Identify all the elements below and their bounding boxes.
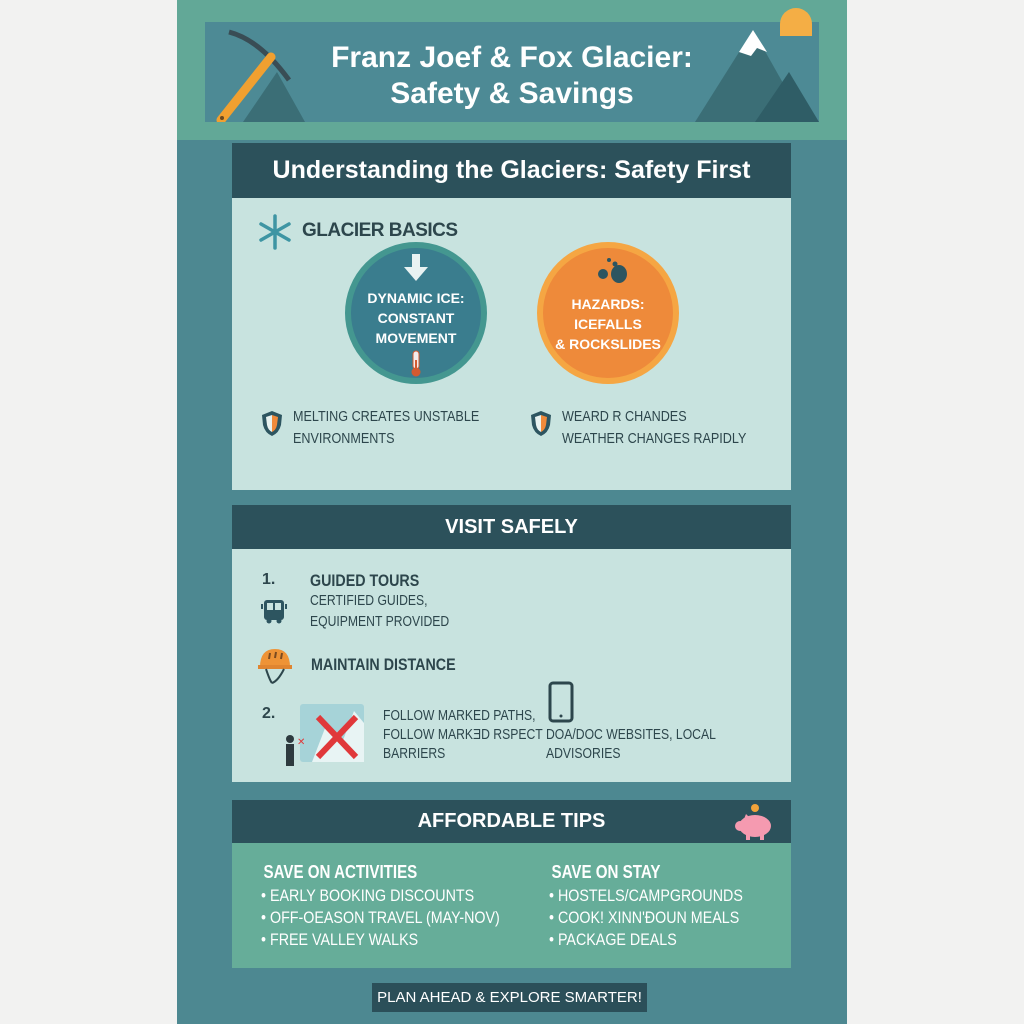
bullet: melting (262, 408, 479, 447)
section 3 header (232, 800, 791, 843)
circle: dynamic ice (345, 242, 487, 384)
section 2 header: VISIT SAFELY (445, 516, 578, 538)
column: save on stay: • PACKAGE DEALS (549, 930, 677, 949)
bullet: weather (531, 408, 746, 447)
column: save on activities: • FREE VALLEY WALKS (261, 930, 418, 949)
item: doc websites: DOA/DOC WEBSITES, LOCAL (546, 727, 716, 743)
circle: dynamic ice: DYNAMIC ICE: (367, 290, 465, 306)
bullet: weather: WEARD R CHANDES (562, 408, 687, 425)
item 2: follow paths: 2. (262, 705, 275, 722)
item 2: follow paths: FOLLOW MARKƎD RSPECT (383, 727, 543, 743)
item: maintain distance (258, 649, 456, 684)
item 2: follow paths (262, 704, 543, 766)
panel: glacier basics (232, 198, 791, 490)
section 3 header: AFFORDABLE TIPS (418, 810, 605, 832)
item 2: follow paths: FOLLOW MARKED PATHS, (383, 708, 535, 724)
bullet: melting: ENVIRONMENTS (293, 430, 395, 447)
icon: barrier crossed: ✕ (297, 737, 305, 748)
title text: Franz Joef & Fox Glacier: (331, 41, 693, 74)
icon: sun (780, 8, 812, 36)
icon: mountain with snow (695, 30, 819, 122)
circle: hazards: HAZARDS: (571, 296, 645, 312)
section 2 header (232, 505, 791, 549)
bullet: weather: WEATHER CHANGES RAPIDLY (562, 430, 746, 447)
bullet: melting: MELTING CREATES UNSTABLE (293, 408, 479, 425)
icon: ice axe and left mountain (216, 30, 305, 122)
section 1 header: Understanding the Glaciers: Safety First (273, 156, 750, 184)
column: save on stay: SAVE ON STAY (552, 862, 660, 882)
circle: dynamic ice: CONSTANT (378, 310, 454, 326)
panel: affordable tips (232, 843, 791, 968)
icon: thermometer (412, 350, 420, 376)
item 1: guided tours: CERTIFIED GUIDES, (310, 593, 428, 609)
section 1 header (232, 143, 791, 198)
icon: rocks (598, 258, 627, 283)
column: save on activities: • OFF-OEASON TRAVEL (MAY-NOV) (261, 908, 500, 927)
footer button: PLAN AHEAD & EXPLORE SMARTER! (377, 989, 642, 1006)
icon: bus (261, 600, 287, 624)
column: save on activities (261, 862, 500, 949)
column: save on activities: SAVE ON ACTIVITIES (264, 862, 417, 882)
column: save on stay: • COOK! XINN'ĐOUN MEALS (549, 908, 739, 927)
title text: Safety & Savings (390, 77, 634, 110)
icon: helmet (258, 649, 292, 684)
column: save on stay (549, 862, 743, 949)
icon: snowflake (259, 214, 291, 250)
icon: barrier crossed (286, 704, 364, 766)
circle: dynamic ice: MOVEMENT (376, 330, 456, 346)
title box (205, 22, 819, 122)
item: doc websites: ADVISORIES (546, 746, 620, 762)
title text (331, 41, 693, 110)
item 1: guided tours: 1. (262, 571, 275, 588)
icon: arrow down (404, 254, 428, 281)
item 1: guided tours (261, 571, 449, 630)
item: maintain distance: MAINTAIN DISTANCE (311, 655, 456, 674)
header band (177, 0, 847, 140)
item 1: guided tours: GUIDED TOURS (310, 571, 419, 590)
item 2: follow paths: BARRIERS (383, 746, 445, 762)
circle: hazards: ICEFALLS (574, 316, 642, 332)
circle: hazards: & ROCKSLIDES (555, 336, 661, 352)
item 1: guided tours: EQUIPMENT PROVIDED (310, 614, 449, 630)
column: save on stay: • HOSTELS/CAMPGROUNDS (549, 886, 743, 905)
heading: glacier basics: GLACIER BASICS (302, 220, 458, 241)
circle: hazards (537, 242, 679, 384)
main column (177, 0, 847, 1024)
icon: phone (548, 682, 574, 722)
icon: piggy bank (735, 804, 771, 840)
footer button (372, 983, 647, 1012)
column: save on activities: • EARLY BOOKING DISCOUNTS (261, 886, 474, 905)
item: doc websites (546, 682, 716, 762)
panel: visit safely (232, 549, 791, 782)
